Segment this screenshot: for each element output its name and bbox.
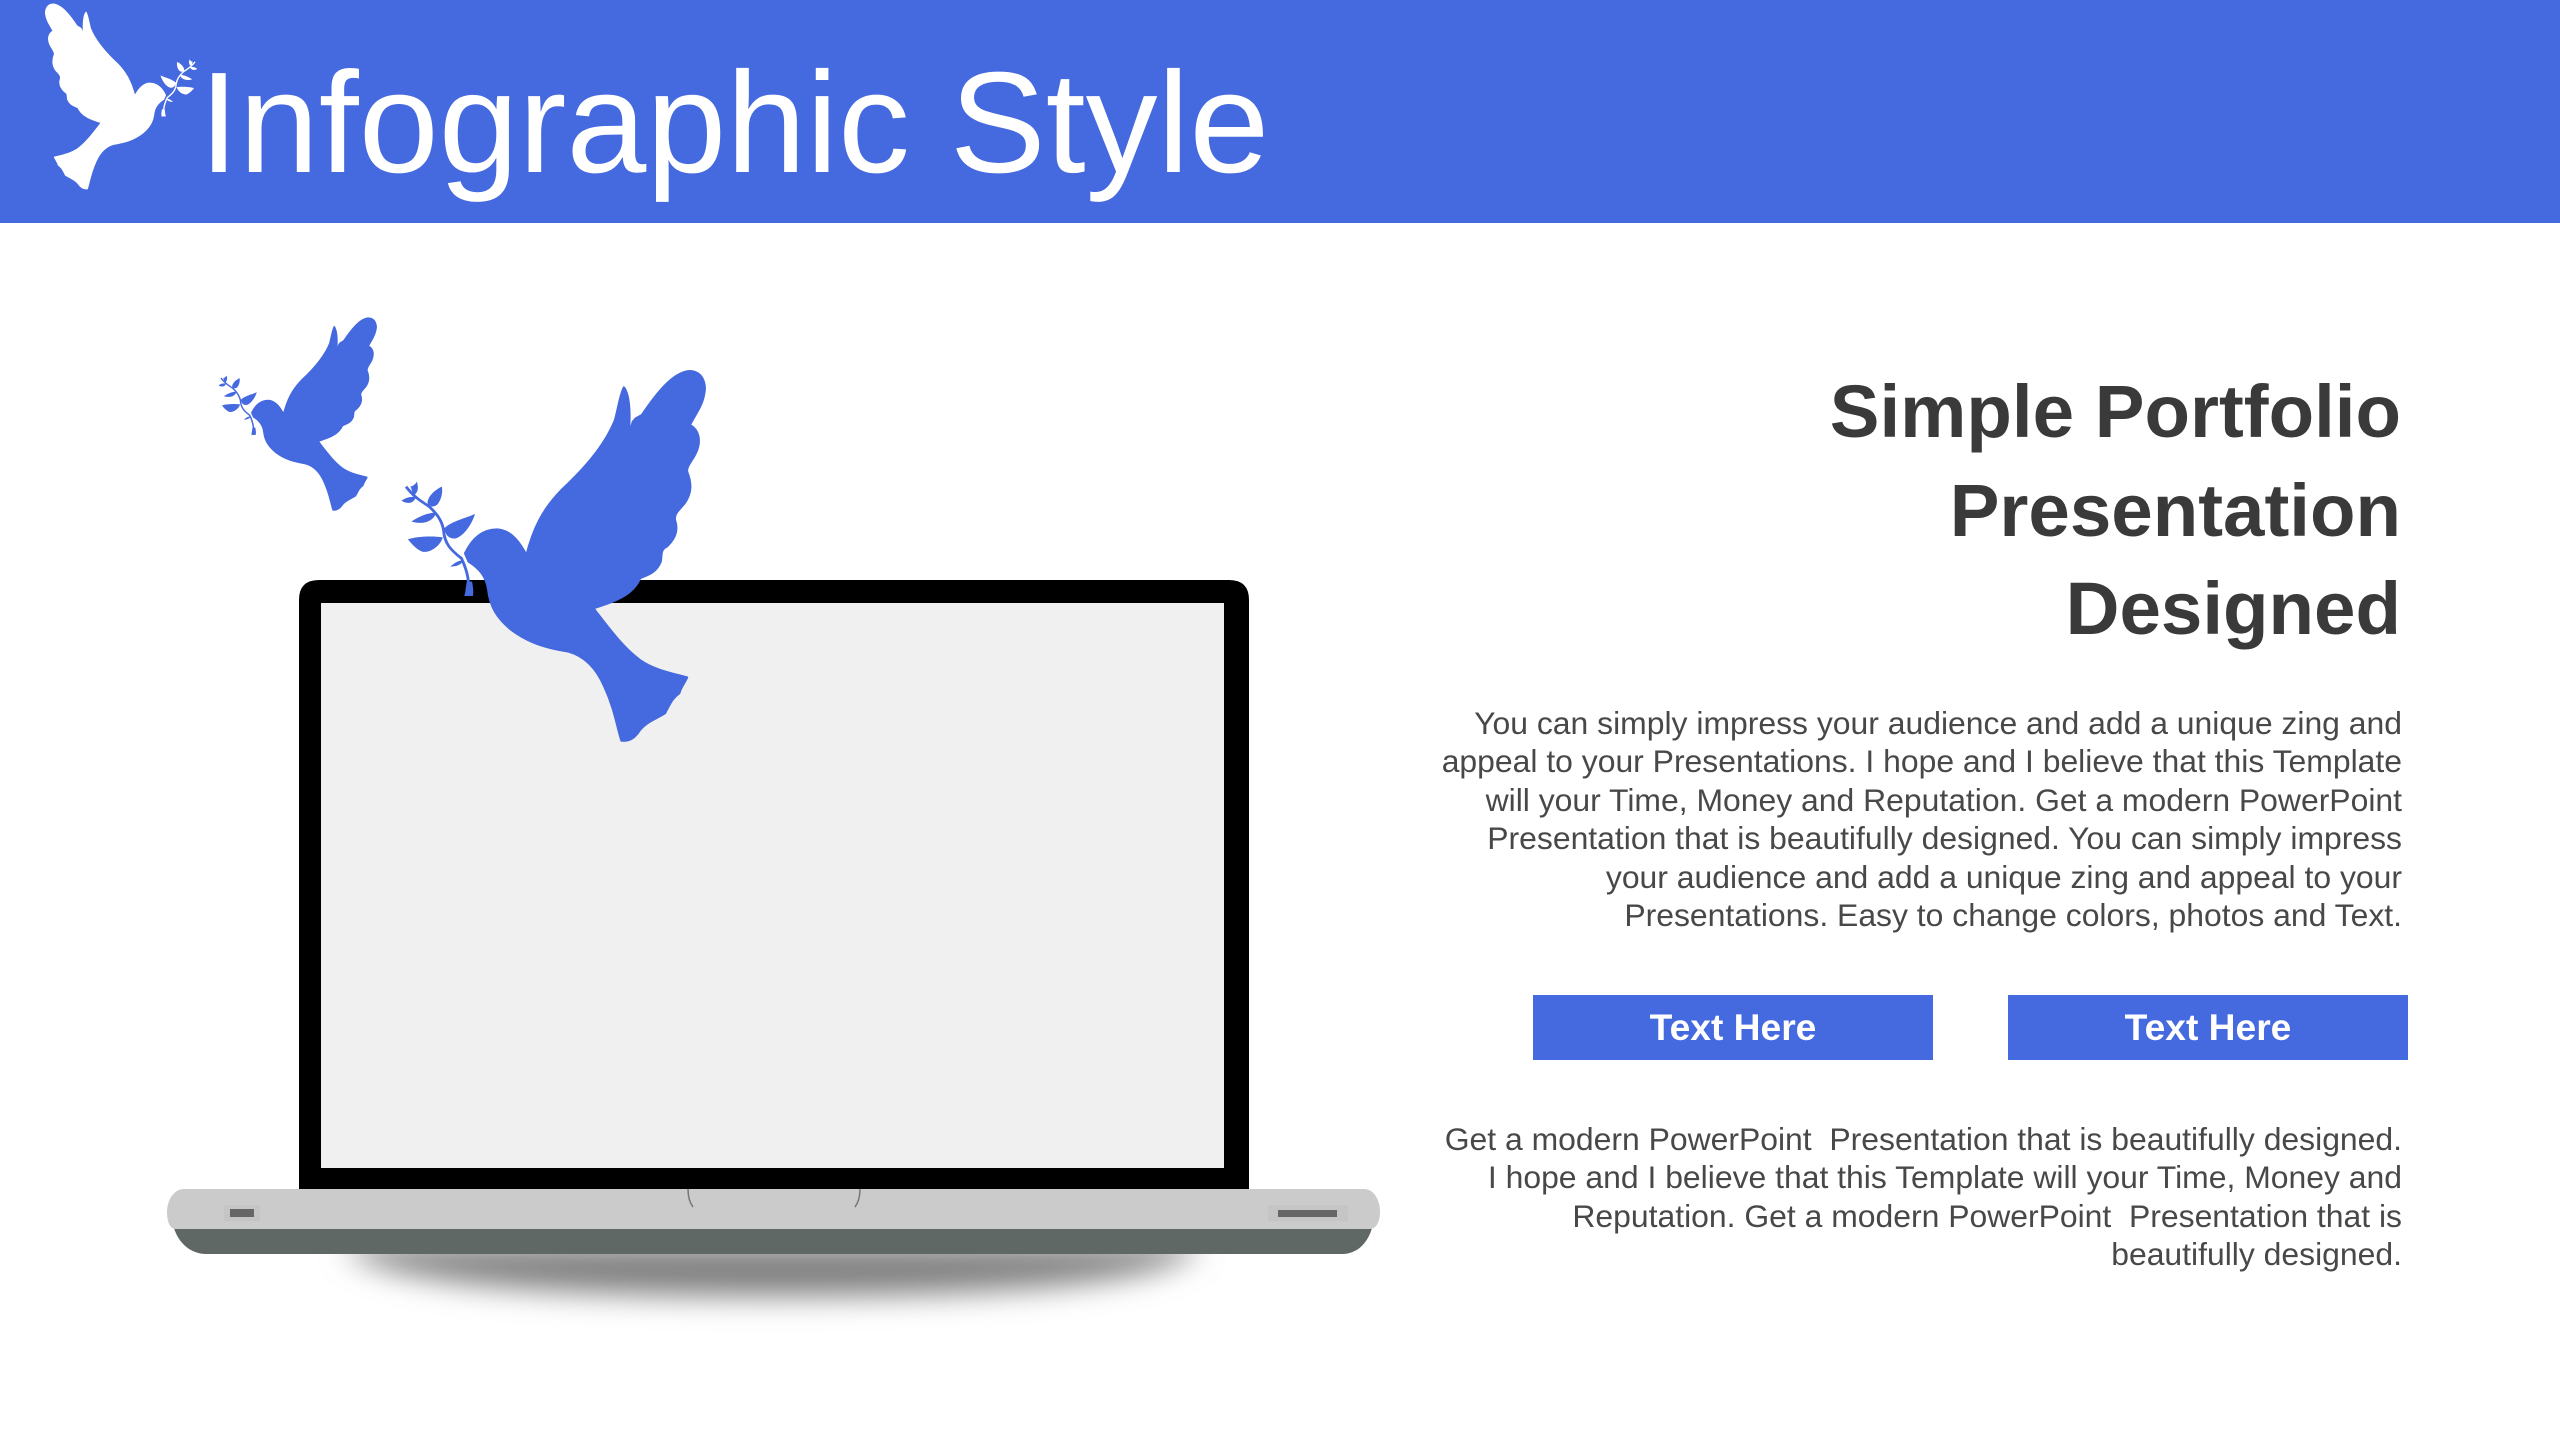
heading: Simple Portfolio <box>1830 370 2401 453</box>
button: right: Text Here <box>2125 1006 2291 1048</box>
laptop base <box>167 1189 1380 1254</box>
laptop lid <box>299 580 1249 1189</box>
text block: lower paragraph <box>1445 1120 2402 1272</box>
text block: intro paragraph: Presentation that is beautifully designed. You can simply impress <box>1487 820 2402 856</box>
text block: intro paragraph: will your Time, Money and Reputation. Get a modern PowerPoint <box>1486 782 2402 818</box>
heading <box>1830 370 2401 650</box>
text block: intro paragraph <box>1442 704 2402 933</box>
text block: intro paragraph: You can simply impress your audience and add a unique zing and <box>1474 704 2402 740</box>
text block: intro paragraph: your audience and add a unique zing and appeal to your <box>1606 858 2402 894</box>
title: Infographic Style <box>199 43 1269 203</box>
icon: large blue dove <box>401 371 705 741</box>
button: right <box>2008 995 2408 1060</box>
laptop shadow <box>345 1245 1200 1296</box>
header banner <box>0 0 2560 223</box>
text block: lower paragraph: I hope and I believe that this Template will your Time, Money and <box>1488 1159 2402 1195</box>
text block: lower paragraph: beautifully designed. <box>2111 1236 2402 1272</box>
text block: intro paragraph: appeal to your Presentations. I hope and I believe that this Template <box>1442 743 2402 779</box>
heading: Presentation <box>1950 469 2401 552</box>
text block: intro paragraph: Presentations. Easy to change colors, photos and Text. <box>1624 897 2402 933</box>
icon: small blue dove <box>219 318 376 510</box>
laptop screen <box>321 603 1224 1168</box>
button: left: Text Here <box>1650 1006 1816 1048</box>
laptop illustration <box>167 317 1380 1318</box>
button: left <box>1533 995 1933 1060</box>
heading: Designed <box>2066 567 2401 650</box>
icon: white dove <box>45 4 198 190</box>
text block: lower paragraph: Get a modern PowerPoint Presentation that is beautifully designed. <box>1445 1120 2402 1156</box>
text block: lower paragraph: Reputation. Get a modern PowerPoint Presentation that is <box>1572 1198 2402 1234</box>
